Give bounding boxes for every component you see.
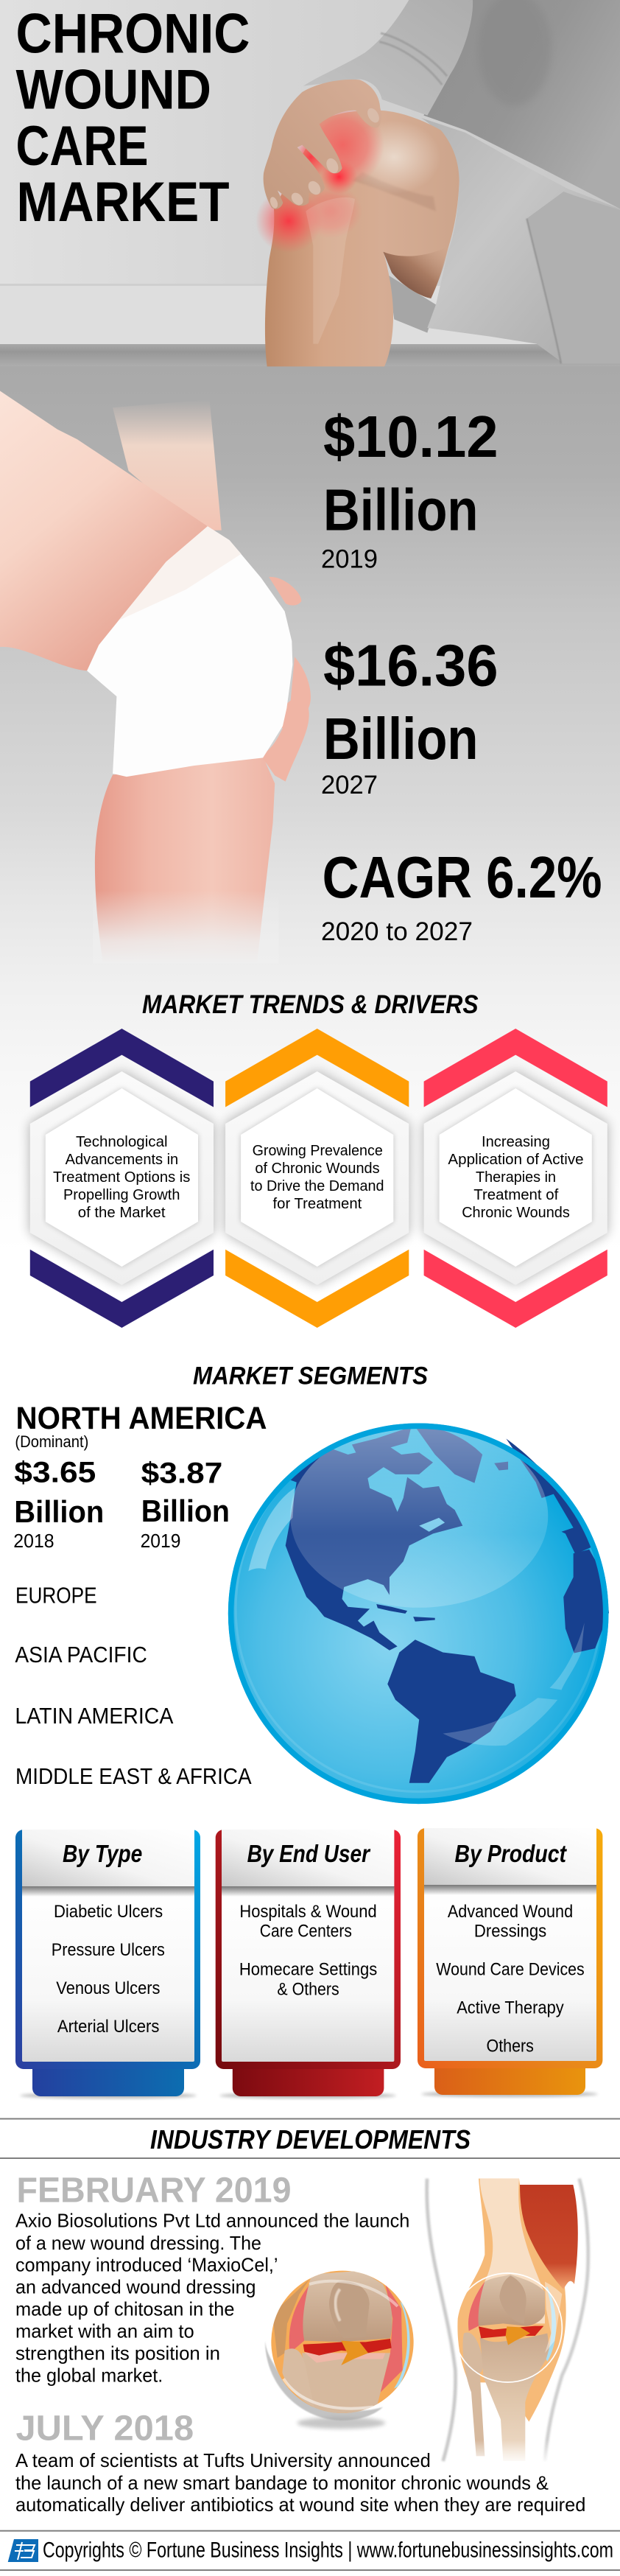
panel: by end user	[216, 1830, 401, 2099]
torso	[423, 0, 620, 209]
development: February 2019: strengthen its position in	[15, 2342, 220, 2365]
under-leg shorts fold	[388, 275, 436, 333]
North America data: 2019	[141, 1530, 180, 1552]
hero photo: knee pain	[256, 0, 620, 366]
shin bone overlay	[306, 197, 355, 344]
panel: by product	[418, 1828, 602, 2097]
title	[16, 2, 250, 234]
hand on knee	[264, 80, 381, 209]
driver 2 text: to Drive the Demand	[250, 1178, 384, 1194]
panel: by type	[15, 1830, 200, 2099]
North America data: $3.87	[141, 1457, 222, 1490]
development: February 2019: made up of chitosan in the	[15, 2298, 234, 2320]
heading: industry developments: INDUSTRY DEVELOPMENTS	[150, 2124, 471, 2155]
kneecap highlight	[348, 120, 441, 194]
footer logo	[8, 2539, 38, 2562]
other regions list: LATIN AMERICA	[15, 1703, 174, 1729]
bandaged leg photo	[0, 391, 311, 964]
by end user items: Care Centers	[260, 1922, 352, 1942]
development: February 2019: the global market.	[15, 2364, 163, 2386]
development: February 2019: company introduced ‘MaxioCel,’	[15, 2254, 278, 2276]
globe	[228, 1424, 609, 1804]
by end user items	[239, 1902, 377, 1999]
title: CARE	[16, 115, 149, 178]
by type items: Venous Ulcers	[56, 1978, 161, 1998]
lower crescent highlight	[443, 1698, 557, 1746]
shorts	[421, 118, 620, 363]
development: July 2018: automatically deliver antibiotics at wound site when they are required	[15, 2493, 585, 2516]
by end user heading: By End User	[247, 1840, 371, 1867]
by product heading: By Product	[455, 1840, 568, 1867]
leg silhouette	[427, 2179, 588, 2465]
great lakes	[419, 1518, 445, 1532]
by product items	[436, 1902, 585, 2057]
North America data: $3.65	[14, 1457, 96, 1489]
fingernails	[269, 106, 381, 209]
other regions list: ASIA PACIFIC	[15, 1642, 147, 1667]
by type items	[52, 1902, 165, 2037]
stat: 2027 market size: Billion	[323, 706, 479, 771]
development: February 2019: FEBRUARY 2019	[16, 2171, 292, 2211]
driver 1 text: Technological	[76, 1134, 168, 1150]
panel: driver 3	[424, 1029, 607, 1328]
by type items: Arterial Ulcers	[57, 2017, 159, 2037]
by type heading: By Type	[63, 1840, 142, 1867]
panel: driver 2	[225, 1029, 409, 1328]
knee detail lens	[265, 2267, 418, 2429]
driver 3 text: Increasing	[482, 1134, 550, 1150]
by end user items: Hospitals & Wound	[239, 1902, 377, 1922]
title: MARKET	[16, 171, 230, 234]
other regions list: EUROPE	[15, 1582, 97, 1608]
development: February 2019: an advanced wound dressing	[15, 2275, 256, 2297]
panel: driver 1	[30, 1029, 214, 1328]
driver 3 text: Chronic Wounds	[462, 1205, 570, 1221]
driver 3 text: Application of Active	[448, 1152, 584, 1168]
North America data: Billion	[14, 1494, 104, 1529]
knee anatomy illustration	[265, 2179, 588, 2465]
North America data: (Dominant)	[15, 1432, 88, 1451]
stat: 2019 market size: 2019	[321, 545, 378, 574]
driver 1 text	[53, 1134, 190, 1221]
by end user items: Homecare Settings	[239, 1960, 377, 1980]
driver 2 text	[250, 1143, 384, 1212]
by type items: Diabetic Ulcers	[54, 1902, 163, 1922]
back of knee shadow	[383, 245, 449, 298]
stat: CAGR: 2020 to 2027	[321, 917, 473, 946]
driver 3 text	[448, 1134, 584, 1221]
by product items: Active Therapy	[457, 1998, 564, 2018]
fingers behind the knee	[269, 577, 301, 606]
development: July 2018: A team of scientists at Tufts University announced	[15, 2449, 431, 2471]
other regions list	[15, 1582, 252, 1789]
development: February 2019: Axio Biosolutions Pvt Ltd announced the launch	[15, 2210, 409, 2232]
North America data: NORTH AMERICA	[16, 1401, 267, 1436]
stat: 2019 market size	[321, 404, 498, 574]
driver 2 text: for Treatment	[272, 1196, 362, 1212]
stat: CAGR	[321, 844, 602, 946]
other regions list: MIDDLE EAST & AFRICA	[15, 1763, 252, 1789]
driver 3 text: Treatment of	[473, 1187, 559, 1203]
sleeve	[303, 0, 473, 116]
development: July 2018: the launch of a new smart bandage to monitor chronic wounds &	[15, 2471, 549, 2493]
development: February 2019	[15, 2171, 409, 2386]
development: February 2019: market with an aim to	[15, 2320, 194, 2342]
development: July 2018	[15, 2409, 585, 2516]
title: CHRONIC	[16, 2, 250, 65]
driver 2 text: of Chronic Wounds	[255, 1161, 380, 1177]
by product items: Wound Care Devices	[436, 1960, 585, 1980]
by product items: Others	[486, 2037, 534, 2057]
North America data: 2018	[13, 1530, 54, 1552]
stat: 2027 market size	[321, 633, 498, 799]
stat: 2027 market size: $16.36	[323, 633, 498, 699]
by type items: Pressure Ulcers	[52, 1940, 165, 1960]
stat: 2019 market size: Billion	[323, 477, 479, 543]
development: February 2019: of a new wound dressing. The	[15, 2232, 261, 2254]
driver 1 text: of the Market	[78, 1205, 166, 1221]
leg	[265, 110, 459, 366]
driver 1 text: Propelling Growth	[63, 1187, 180, 1203]
left crescent highlight	[248, 1488, 295, 1571]
knee crease shading	[353, 172, 436, 211]
North America data	[13, 1401, 267, 1552]
North America data: Billion	[141, 1494, 230, 1528]
continents	[286, 1427, 609, 1783]
gauze bandage	[87, 526, 292, 777]
driver 1 text: Treatment Options is	[53, 1169, 190, 1186]
driver 3 text: Therapies in	[476, 1169, 556, 1186]
red inflammation glow	[256, 103, 384, 253]
driver 1 text: Advancements in	[66, 1152, 178, 1168]
hero backdrop: wall and floor	[0, 0, 620, 366]
stat: 2019 market size: $10.12	[323, 404, 498, 469]
title: WOUND	[16, 59, 211, 122]
glossy cap highlight	[290, 1424, 548, 1608]
heading: market segments: MARKET SEGMENTS	[193, 1362, 428, 1390]
by end user items: & Others	[277, 1979, 339, 1999]
driver 2 text: Growing Prevalence	[253, 1143, 383, 1159]
heading: market trends and drivers: MARKET TRENDS & DRIVERS	[142, 990, 479, 1019]
by product items: Dressings	[474, 1922, 546, 1942]
stat: 2027 market size: 2027	[321, 771, 378, 799]
by product items: Advanced Wound	[448, 1902, 573, 1922]
development: July 2018: JULY 2018	[16, 2409, 194, 2449]
